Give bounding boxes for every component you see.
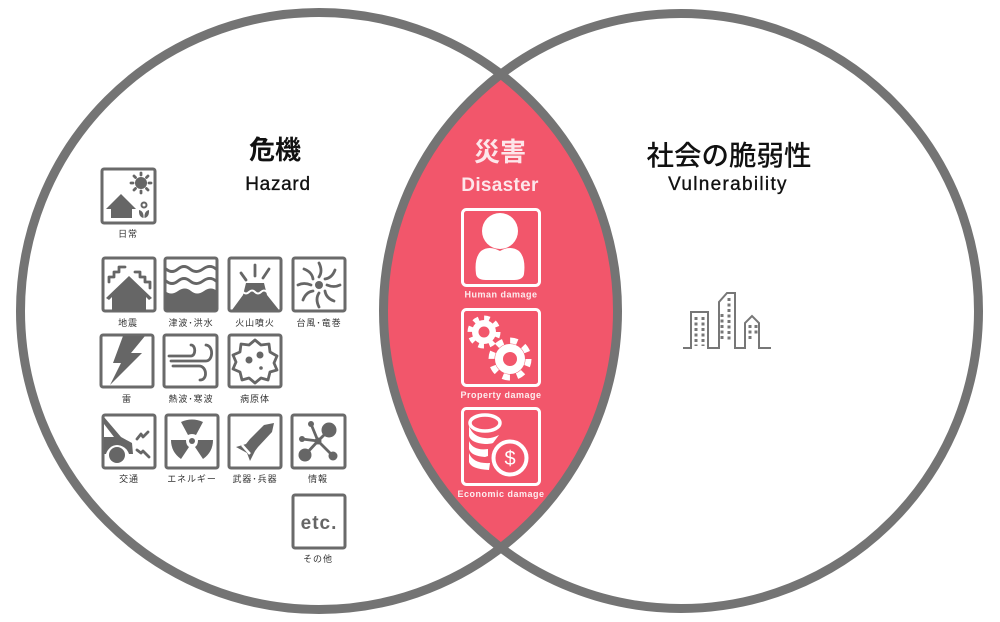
vulnerability circle: [384, 14, 978, 608]
icon: etc: etc.: [301, 513, 337, 534]
icon: earthquake: [103, 258, 155, 311]
icon: traffic accident: [103, 415, 155, 468]
icon: lightning: [101, 335, 153, 387]
vulnerability heading: [646, 140, 812, 195]
hazard heading: Hazard: [245, 174, 311, 195]
hazard heading: 危機: [249, 135, 301, 165]
icon: coins: $: [504, 448, 516, 470]
disaster heading: [461, 137, 539, 196]
label: other: その他: [303, 553, 333, 564]
label: lightning: 雷: [122, 394, 132, 404]
label: information: 情報: [308, 473, 328, 484]
icon: gears: [470, 318, 528, 378]
icon: etc: [293, 495, 345, 548]
label: heat and cold waves: 熱波･寒波: [168, 393, 214, 404]
label: economic damage: Economic damage: [457, 489, 545, 499]
label: property damage: Property damage: [460, 390, 542, 400]
hazard circle: [20, 12, 618, 610]
icon: volcano: [229, 258, 281, 311]
icon: daily life: [102, 169, 155, 223]
label: daily life: 日常: [118, 228, 138, 239]
icon: city buildings: [683, 293, 771, 348]
label: typhoon and tornado: 台風･竜巻: [296, 317, 342, 328]
icon: heat and cold waves: [164, 335, 217, 387]
label: traffic: 交通: [119, 474, 139, 484]
icon: tsunami and flood: [165, 258, 217, 311]
panel: human damage: [462, 210, 540, 300]
vulnerability heading: 社会の脆弱性: [646, 140, 812, 171]
disaster heading: 災害: [474, 137, 526, 167]
icon: weapons: [229, 415, 281, 468]
icon: information network: [292, 415, 345, 468]
panel: economic damage: [457, 408, 545, 499]
label: energy: エネルギー: [167, 474, 217, 484]
vulnerability heading: Vulnerability: [668, 174, 788, 195]
icon: pathogen: [229, 335, 281, 387]
disaster heading: Disaster: [461, 175, 539, 196]
icon: typhoon and tornado: [293, 258, 345, 311]
icon: person: [476, 213, 524, 280]
hazard heading: [245, 135, 311, 195]
label: pathogen: 病原体: [240, 393, 270, 404]
panel: property damage: [460, 310, 542, 400]
label: weapons: 武器･兵器: [232, 473, 278, 484]
label: volcano: 火山噴火: [235, 317, 275, 328]
label: earthquake: 地震: [118, 317, 138, 328]
label: human damage: Human damage: [464, 290, 538, 300]
label: tsunami and flood: 津波･洪水: [168, 317, 214, 328]
icon: energy radiation: [166, 415, 218, 468]
disaster overlap lens: [380, 72, 620, 550]
